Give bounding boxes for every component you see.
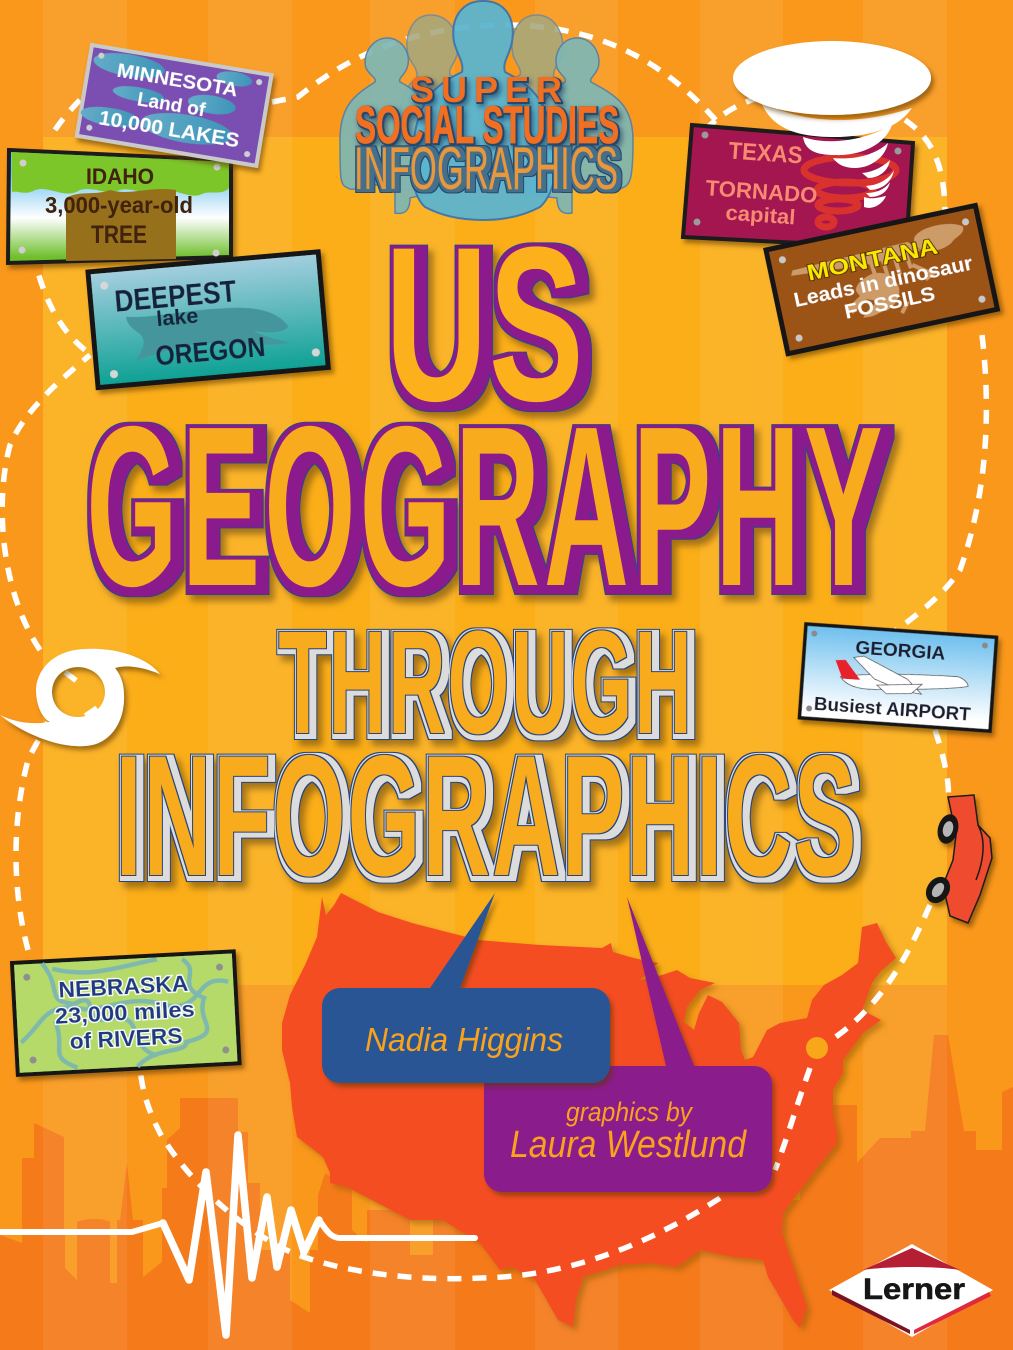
sign: Idaho tree [8, 150, 231, 263]
sign: Montana dinosaur fossils [766, 206, 997, 354]
series logo: Super Social Studies Infographics: SOCIAL STUDIES [355, 96, 619, 155]
city skyline silhouette [0, 1035, 1013, 1350]
sign: Georgia busiest airport: Busiest AIRPORT [813, 694, 971, 725]
sign: Montana dinosaur fossils: FOSSILS [843, 283, 937, 324]
icon: airplane [833, 654, 970, 699]
sign: Idaho tree: 3,000-year-old [45, 192, 193, 218]
sign: Texas tornado capital [683, 125, 913, 243]
title: INFOGRAPHICS: INFOGRAPHICS [116, 721, 858, 912]
icon: hurricane symbol [0, 649, 160, 746]
sign: Minnesota lakes: 10,000 LAKES [97, 107, 241, 152]
series logo: Super Social Studies Infographics: SUPER [410, 69, 562, 110]
sign: Nebraska rivers: NEBRASKA [58, 971, 189, 1003]
blue speech bubble: author [322, 893, 610, 1083]
publisher logo: Lerner [829, 1244, 993, 1337]
icon: red car [921, 795, 992, 923]
sign: Montana dinosaur fossils: MONTANA [805, 234, 940, 286]
blue speech bubble: author: Nadia Higgins [365, 1021, 563, 1058]
sign: Texas tornado capital: capital [725, 202, 796, 229]
publisher logo: Lerner: Lerner [863, 1273, 965, 1306]
sign: Nebraska rivers [12, 951, 240, 1075]
series logo: Super Social Studies Infographics [340, 1, 633, 220]
title: THROUGH: THROUGH [278, 601, 694, 765]
sign: Texas tornado capital: TEXAS [728, 137, 803, 170]
sign: Oregon deepest lake: DEEPEST [113, 273, 238, 319]
sign: Georgia busiest airport [799, 624, 997, 731]
sign: Idaho tree: IDAHO [86, 164, 154, 189]
title: US: US [385, 202, 585, 448]
sign: Minnesota lakes: MINNESOTA [115, 61, 239, 102]
sign: Minnesota lakes [77, 45, 272, 166]
sign: Oregon deepest lake [88, 252, 328, 388]
sign: Minnesota lakes: Land of [136, 89, 207, 122]
sign: Idaho tree: TREE [91, 221, 147, 249]
purple speech bubble: illustrator: graphics by [566, 1097, 693, 1127]
purple speech bubble: illustrator [484, 897, 772, 1192]
route stop marker [806, 1037, 828, 1059]
sign: Texas tornado capital: TORNADO [705, 175, 818, 208]
sign: Nebraska rivers: 23,000 miles [54, 997, 195, 1029]
sign: Nebraska rivers: of RIVERS [69, 1023, 183, 1054]
sign: Montana dinosaur fossils: Leads in dinosaur [792, 253, 975, 312]
sign: Georgia busiest airport: GEORGIA [855, 637, 946, 664]
purple speech bubble: illustrator: Laura Westlund [510, 1124, 748, 1166]
sign: Oregon deepest lake: OREGON [154, 331, 267, 371]
icon: seismograph line [0, 1135, 475, 1335]
sign: Oregon deepest lake: lake [155, 305, 199, 331]
title: GEOGRAPHY: GEOGRAPHY [86, 380, 887, 634]
US map [282, 893, 896, 1328]
icon: tornado [733, 41, 931, 208]
series logo: Super Social Studies Infographics: INFOGRAPHICS [354, 135, 618, 202]
